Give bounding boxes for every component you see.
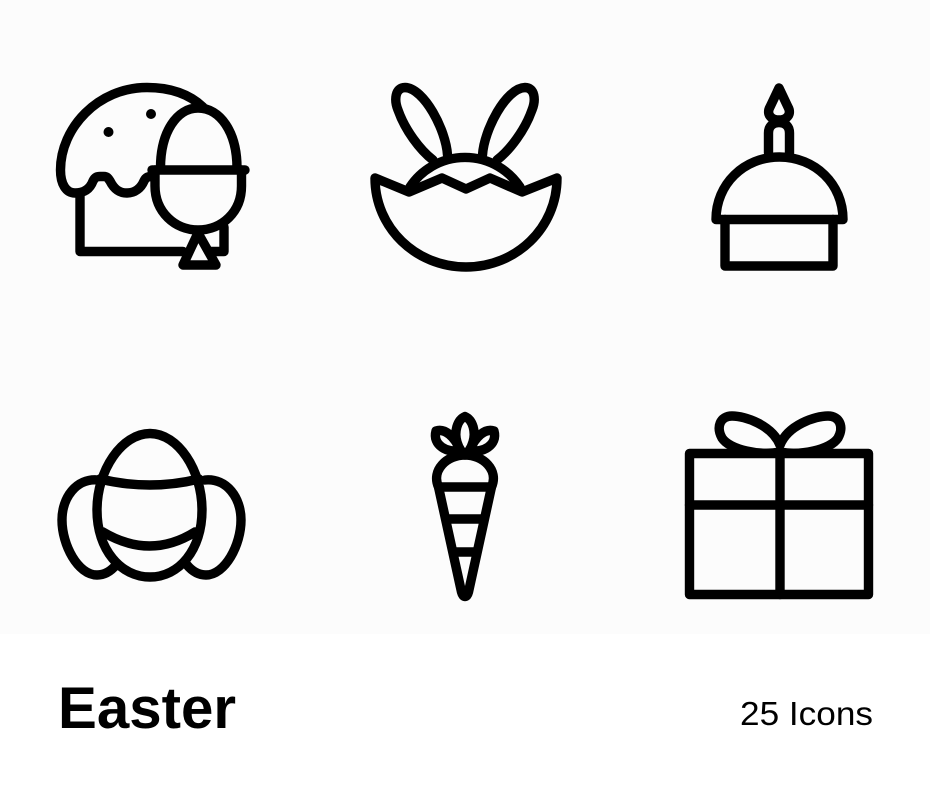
icon: Easter cake with egg in cup bbox=[60, 88, 245, 265]
icon: bunny ears in cracked egg bbox=[375, 88, 557, 267]
title: Easter bbox=[58, 676, 236, 741]
right ear bbox=[482, 88, 534, 160]
icon: carrot bbox=[435, 416, 495, 596]
icon: cake with candle bbox=[716, 88, 843, 266]
left ear bbox=[396, 88, 448, 160]
icon: gift box bbox=[690, 416, 868, 594]
icon: decorated egg with wings bbox=[62, 434, 241, 577]
icon count: 25 Icons bbox=[740, 695, 873, 732]
bunny head bbox=[410, 157, 520, 187]
cracked shell bbox=[375, 178, 557, 267]
